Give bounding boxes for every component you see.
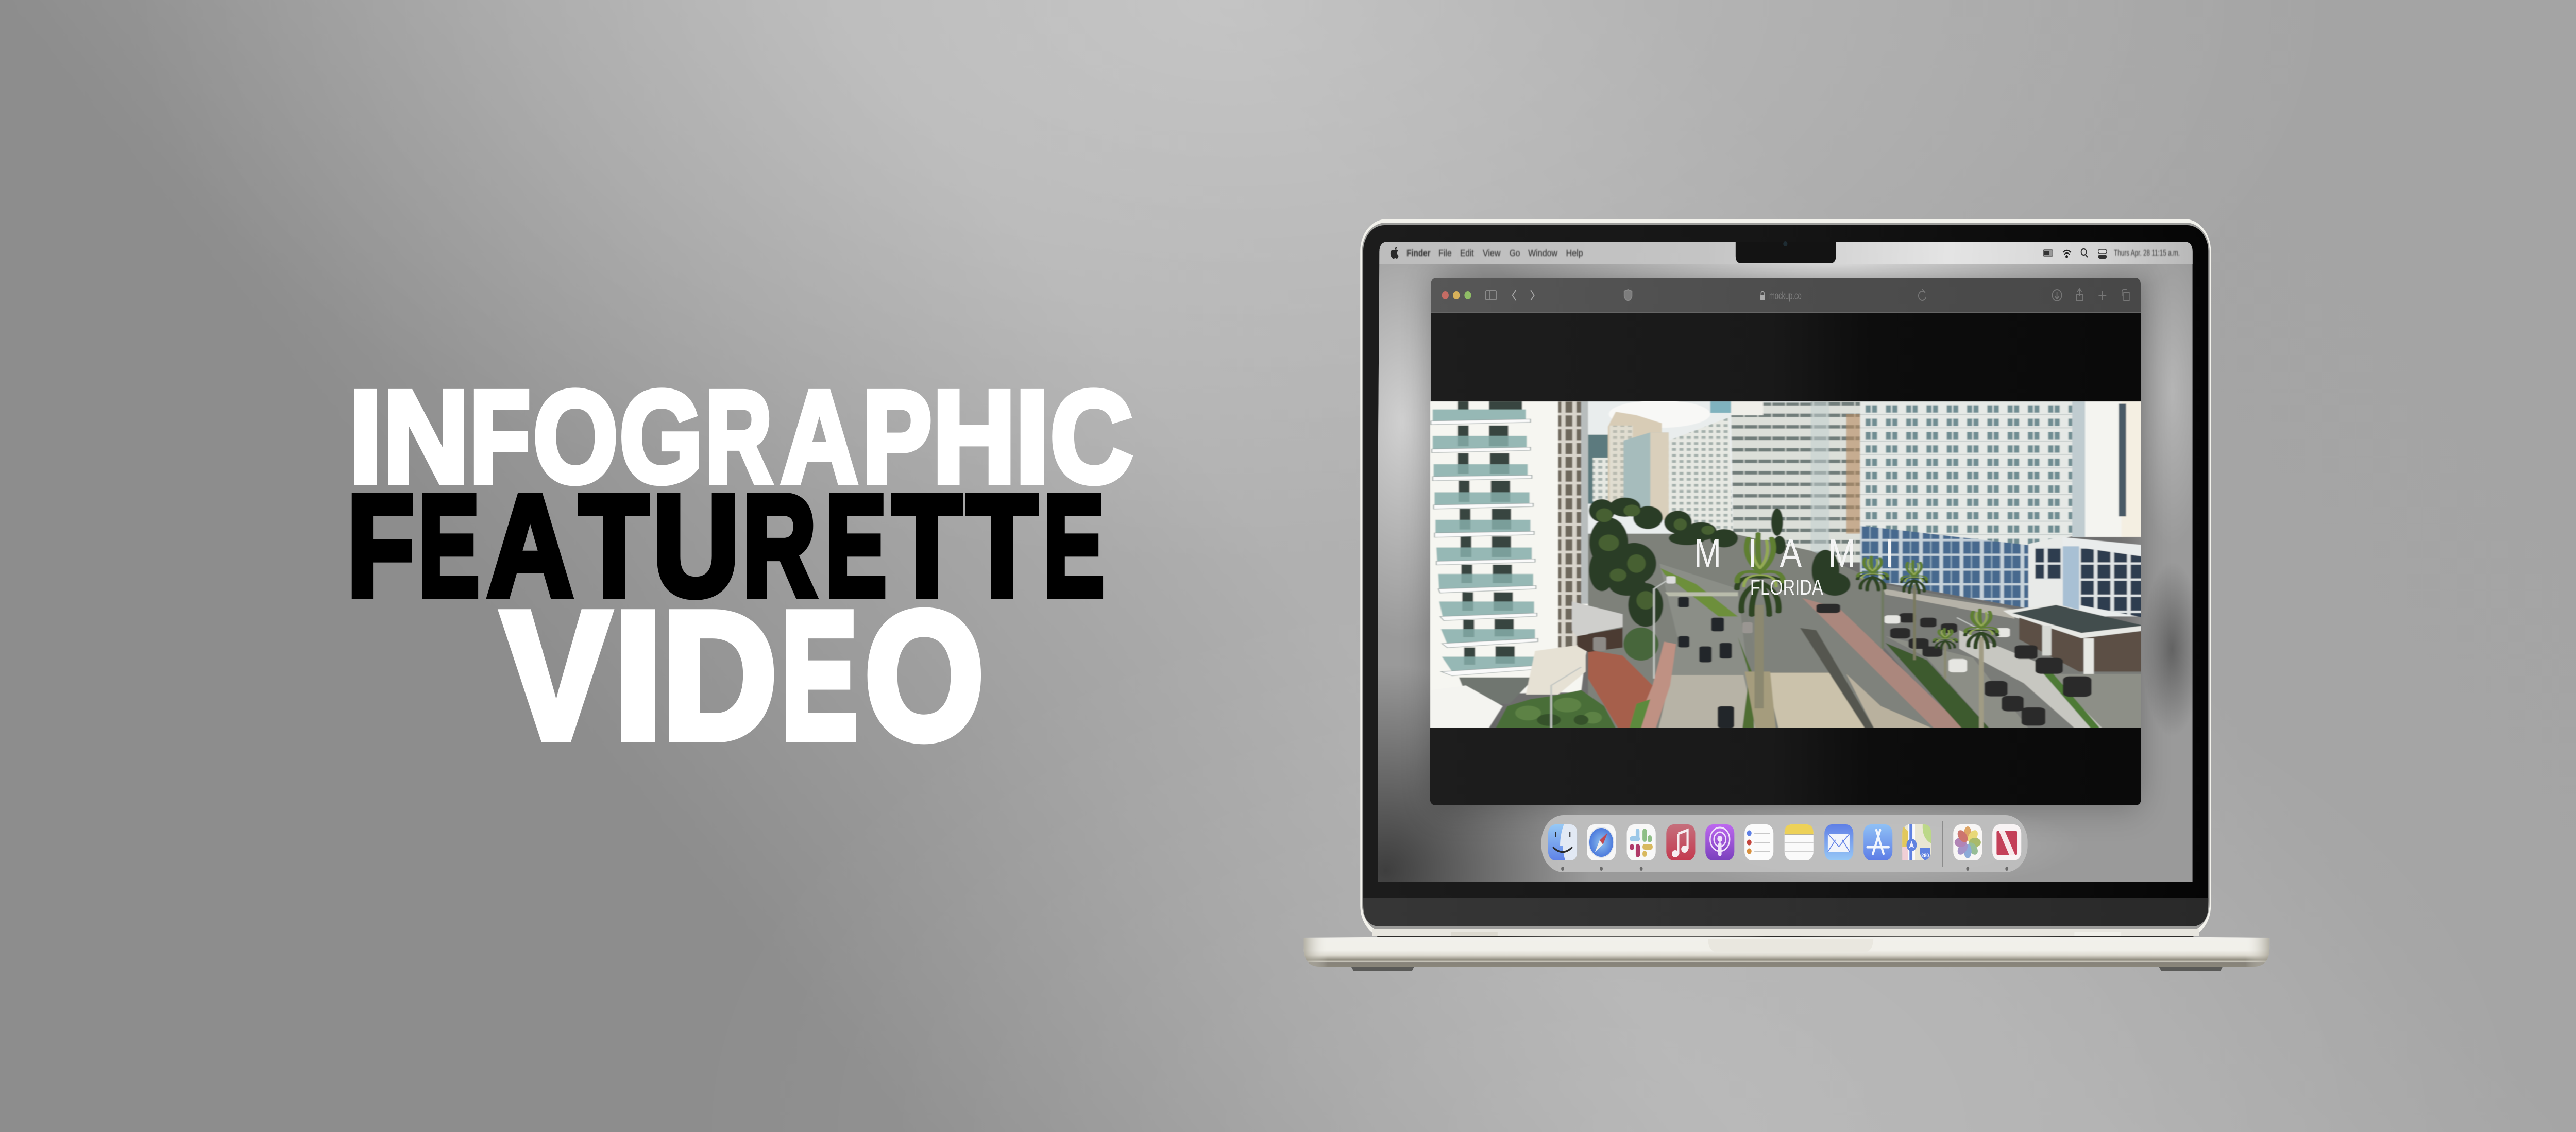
heading line: FEATURETTE: E xyxy=(418,465,480,626)
heading line: FEATURETTE: A xyxy=(487,465,573,626)
status icons xyxy=(2043,249,2107,259)
icon: maps xyxy=(1902,824,1931,860)
video title: MIAMI xyxy=(1694,531,1894,575)
thumb notch xyxy=(1708,939,1873,953)
heading line: VIDEO: E xyxy=(781,575,857,776)
heading line: FEATURETTE: T xyxy=(892,465,961,626)
clock: Thurs Apr. 28 11:15 a.m. xyxy=(2114,249,2180,258)
running dots xyxy=(1561,867,2008,871)
icon: slack xyxy=(1627,824,1656,860)
heading line: INFOGRAPHIC: I xyxy=(349,364,382,510)
screen bezel xyxy=(1363,225,2208,926)
tower slabs xyxy=(1431,419,1541,676)
hinge strip xyxy=(1372,929,2199,937)
icon: podcasts xyxy=(1705,824,1734,860)
bottom chin xyxy=(1363,898,2208,926)
heading line: VIDEO: D xyxy=(663,575,776,776)
heading line: INFOGRAPHIC: H xyxy=(933,364,1015,510)
menu items: Help xyxy=(1566,248,1583,258)
heading line: INFOGRAPHIC: N xyxy=(383,364,469,510)
icon: news xyxy=(1992,824,2021,860)
traffic lights xyxy=(1442,291,1471,299)
icon: music xyxy=(1666,824,1695,860)
white cars xyxy=(1593,615,2010,672)
main building upper xyxy=(1860,401,2075,545)
heading line: INFOGRAPHIC: P xyxy=(862,364,932,510)
menu items: Edit xyxy=(1460,248,1474,258)
dock background xyxy=(1541,815,2028,872)
icon: mail xyxy=(1824,824,1853,860)
main building glass floor xyxy=(1860,526,2028,609)
video title xyxy=(1694,531,1894,600)
red brick plaza and pink walkway xyxy=(1588,650,1653,728)
sky xyxy=(1587,401,1811,534)
menu items: File xyxy=(1438,248,1452,258)
tower balconies xyxy=(1433,410,1539,672)
left road xyxy=(1659,564,1754,728)
letterbox bottom xyxy=(1430,728,2141,805)
parking lot xyxy=(2038,674,2144,728)
screen xyxy=(1378,241,2193,882)
heading line: VIDEO: I xyxy=(614,575,662,776)
parked cars xyxy=(1816,604,2092,725)
icon: maps: 280 xyxy=(1921,853,1929,859)
heading line: VIDEO: O xyxy=(865,575,984,776)
heading line: VIDEO: V xyxy=(502,575,611,776)
tower dark windows xyxy=(1458,401,1522,665)
lid inner edge xyxy=(1362,223,2210,933)
title xyxy=(347,364,1133,776)
menu items: View xyxy=(1483,248,1501,258)
median left xyxy=(1660,568,1738,616)
heading line: FEATURETTE: T xyxy=(580,465,649,626)
right block xyxy=(2063,537,2144,616)
left tower xyxy=(1430,401,1588,728)
white tower xyxy=(2072,401,2123,537)
rubber feet xyxy=(1350,966,1415,971)
road cars xyxy=(1667,576,1753,728)
laptop lid frame xyxy=(1360,219,2211,938)
driveway canopy xyxy=(1572,601,1623,636)
icon: notes xyxy=(1785,824,1814,860)
icon: reminders xyxy=(1744,824,1773,860)
heading line: INFOGRAPHIC: A xyxy=(781,364,858,510)
address text: mockup.co xyxy=(1769,291,1802,302)
ground xyxy=(1588,534,1883,728)
menu bar xyxy=(1379,242,2193,264)
curved retaining wall xyxy=(1959,630,2102,728)
heading line: FEATURETTE: E xyxy=(825,465,887,626)
wallpaper xyxy=(1378,242,2193,882)
heading line: INFOGRAPHIC: O xyxy=(533,364,618,510)
icon: app store xyxy=(1863,824,1892,860)
street lamps xyxy=(1551,581,1981,728)
icon: finder xyxy=(1548,824,1577,860)
laptop base xyxy=(1304,937,2269,971)
toolbar icons xyxy=(1486,289,2129,301)
heading line: FEATURETTE: U xyxy=(653,465,739,626)
laptop mockup xyxy=(1303,219,2270,971)
heading line: INFOGRAPHIC: G xyxy=(619,364,703,510)
hotel forecourt wall xyxy=(1883,584,2144,728)
menu items: Window xyxy=(1528,248,1557,258)
trees xyxy=(1589,498,1851,627)
dock divider xyxy=(1942,821,1943,867)
shrubs xyxy=(1496,628,1658,728)
letterbox top xyxy=(1431,313,2141,401)
dock xyxy=(1541,815,2028,872)
menu items: Go xyxy=(1510,248,1520,258)
heading line: INFOGRAPHIC: F xyxy=(469,364,531,510)
heading line: INFOGRAPHIC: C xyxy=(1050,364,1133,510)
pink sidewalk right xyxy=(1803,598,1964,728)
video frame: Miami street scene xyxy=(1430,400,2145,728)
browser toolbar xyxy=(1431,278,2141,313)
heading line: FEATURETTE: T xyxy=(967,465,1037,626)
heading line: INFOGRAPHIC: R xyxy=(705,364,772,510)
heading line: FEATURETTE: R xyxy=(742,465,816,626)
palm trees xyxy=(1737,534,1997,728)
distant buildings xyxy=(1588,401,1860,562)
icon: safari xyxy=(1587,824,1616,860)
heading line: FEATURETTE: F xyxy=(347,465,414,626)
menu items: Finder xyxy=(1406,248,1431,258)
notch xyxy=(1736,241,1836,263)
right road xyxy=(1742,594,1959,728)
green verge right xyxy=(1886,643,1989,728)
apple logo xyxy=(1391,247,1399,259)
canopy xyxy=(2003,604,2144,638)
icon: photos xyxy=(1953,824,1982,860)
heading line: INFOGRAPHIC: I xyxy=(1015,364,1049,510)
video title: FLORIDA xyxy=(1750,576,1823,600)
heading line: FEATURETTE: E xyxy=(1043,465,1105,626)
menu items xyxy=(1406,248,1583,258)
browser window xyxy=(1430,278,2145,805)
lock icon xyxy=(1760,292,1765,300)
